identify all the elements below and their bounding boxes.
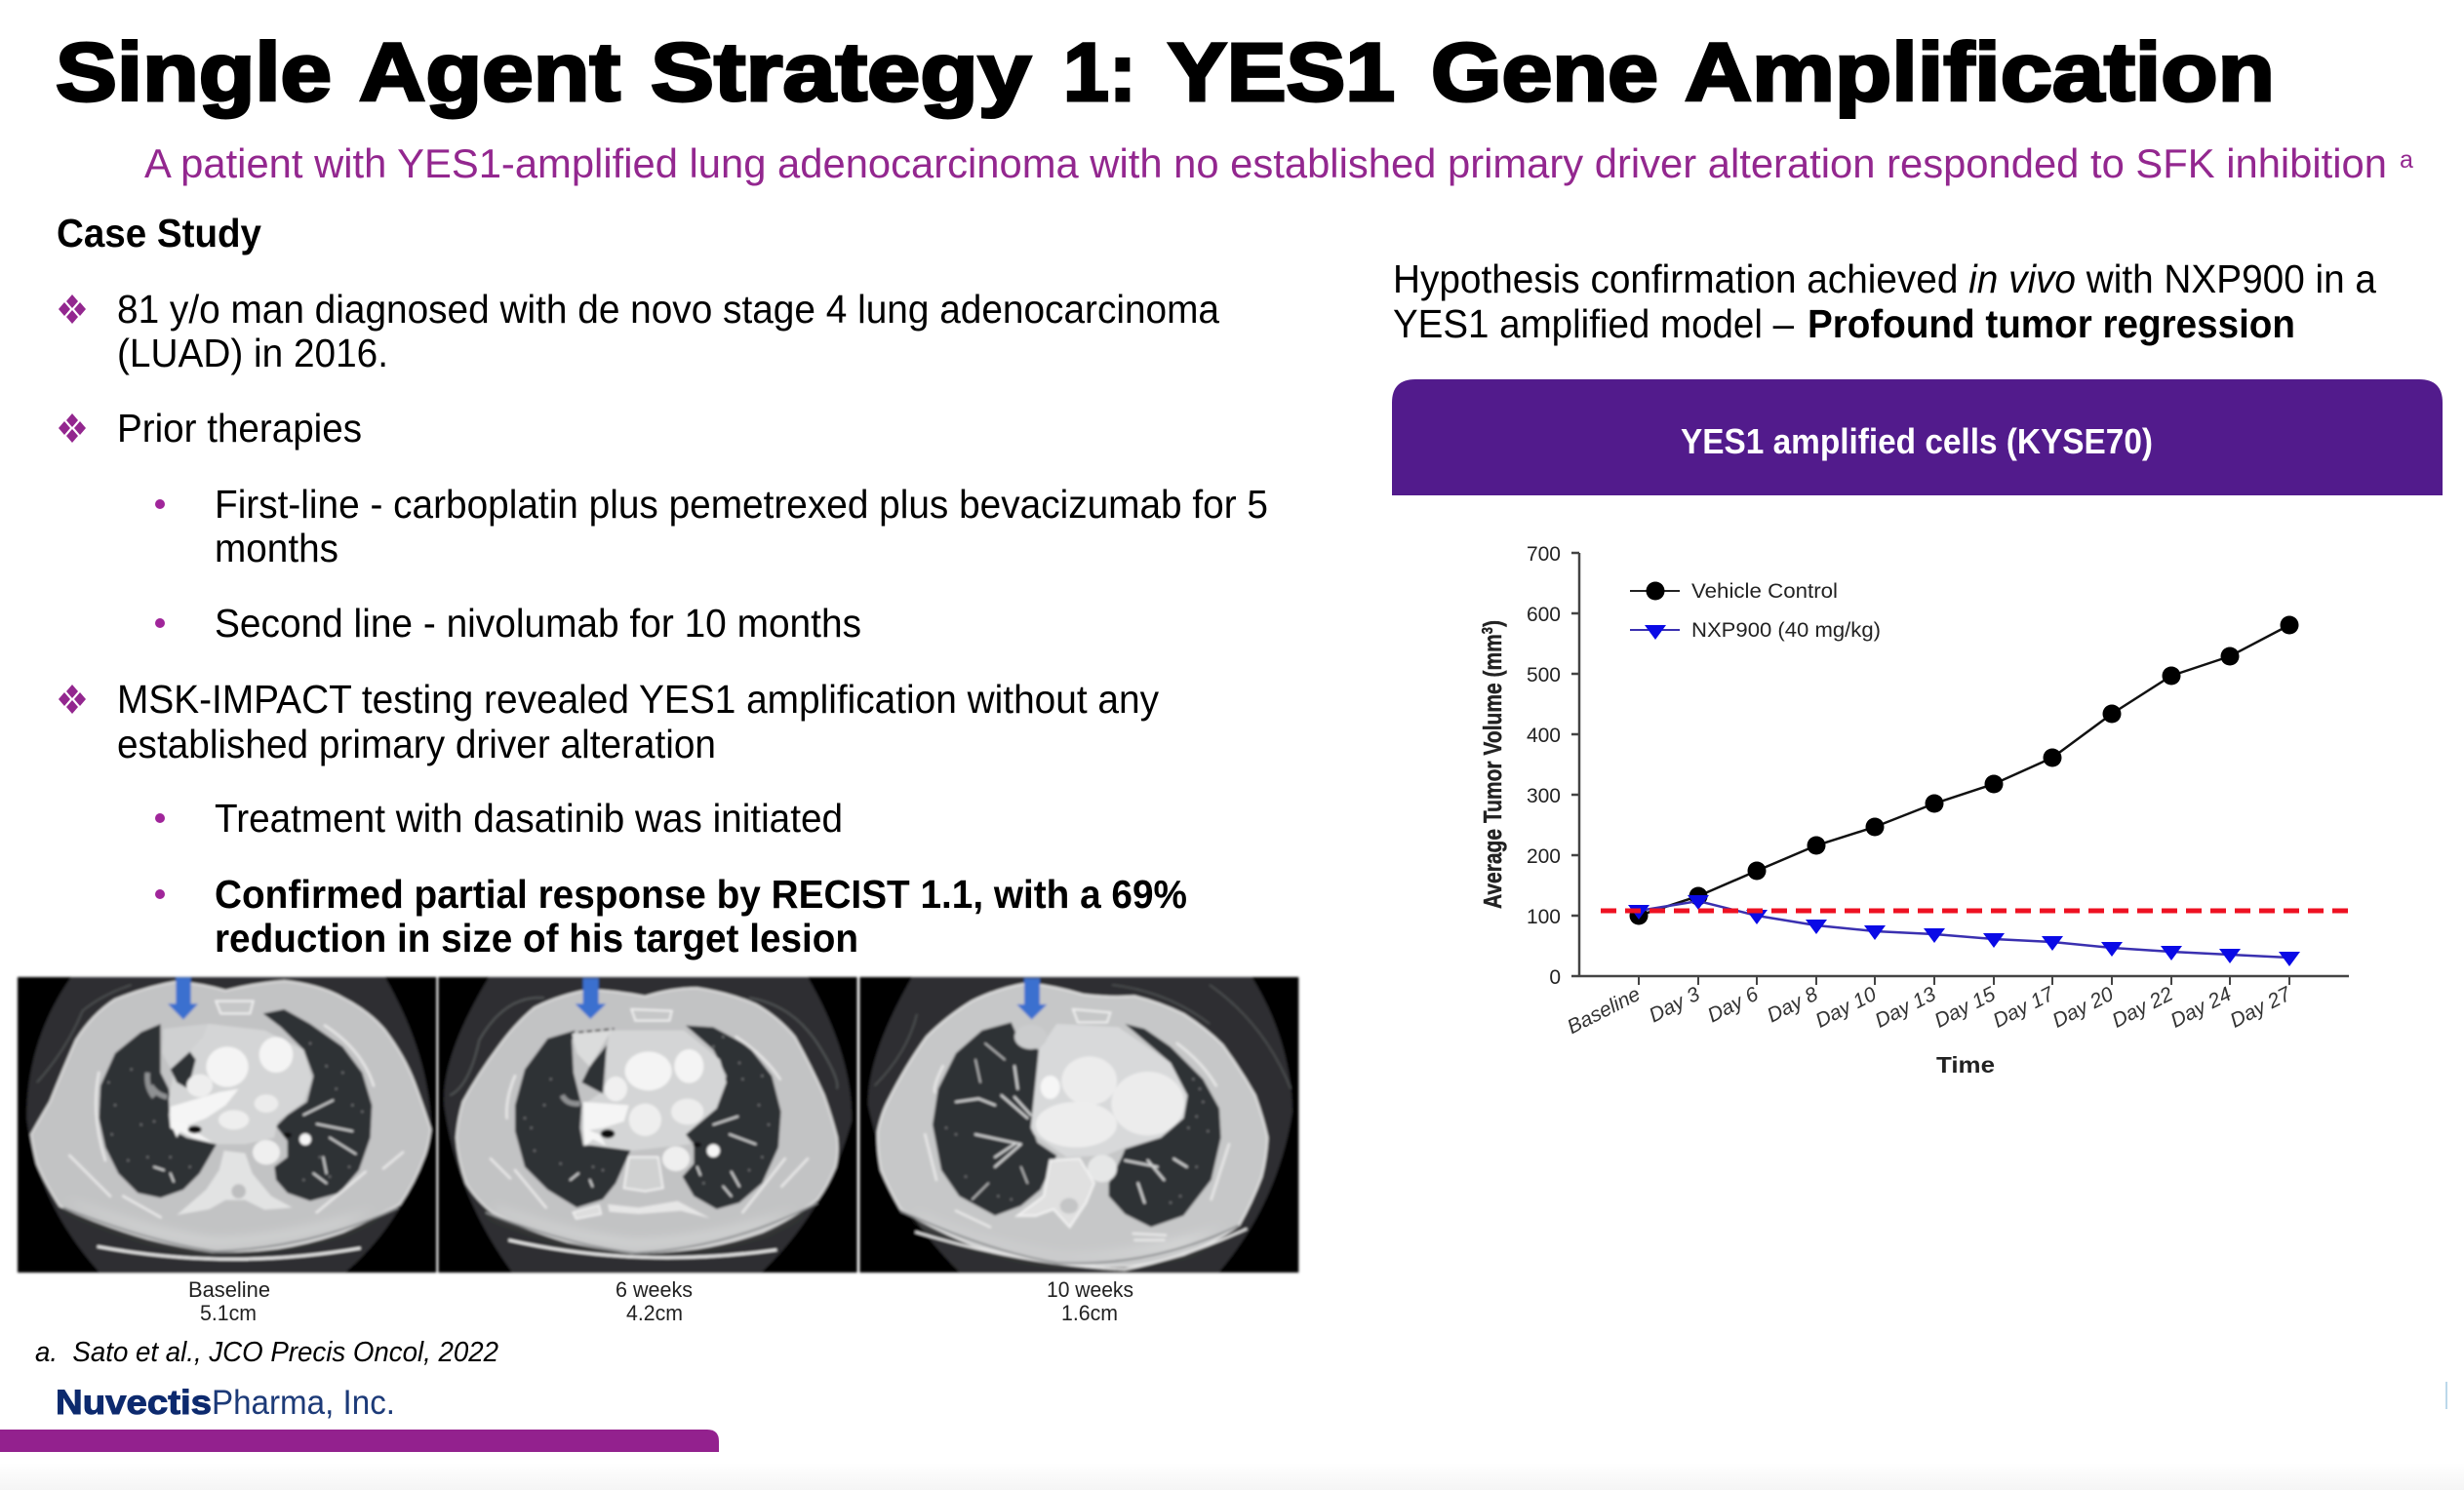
sub-bullet: confirmed response: reduction in size of his target lesion xyxy=(215,916,858,961)
y-axis tick labels: 200 xyxy=(1527,845,1561,868)
CT scan: 6 weeks xyxy=(438,977,857,1273)
x-axis labels: Day 27 xyxy=(2227,982,2295,1033)
series: NXP900 xyxy=(1628,895,2300,966)
CT scan captions: 5.1cm xyxy=(200,1301,257,1325)
y-axis title: Average Tumor Volume (mm xyxy=(1478,569,1507,909)
footer bar xyxy=(0,1430,719,1452)
CT scan captions xyxy=(188,1277,1133,1325)
bullet: patient xyxy=(59,287,1219,375)
sub-bullet: confirmed response xyxy=(155,872,1187,961)
x-axis title: Time xyxy=(1936,1052,1995,1078)
hypothesis text: Profound tumor regression xyxy=(1808,301,2295,346)
x-axis labels: Day 6 xyxy=(1704,983,1763,1027)
CT scan panels xyxy=(18,977,1298,1273)
y-axis tick labels: 0 xyxy=(1549,966,1561,989)
CT scan captions: 4.2cm xyxy=(626,1301,683,1325)
x-axis labels: Day 17 xyxy=(1990,982,2058,1033)
x-axis labels: Day 20 xyxy=(2049,983,2118,1033)
sub-bullet: second line: Second line - nivolumab for 10 months xyxy=(215,601,861,646)
x-axis labels: Day 22 xyxy=(2109,983,2177,1033)
logo: Nuvectis Pharma xyxy=(56,1384,395,1422)
arrow: 10 weeks lesion xyxy=(1016,978,1047,1020)
x-axis labels: Day 10 xyxy=(1812,983,1881,1033)
x-axis labels: Day 13 xyxy=(1872,983,1940,1033)
CT scan captions: 10 weeks xyxy=(1047,1277,1133,1302)
footnote: a. Sato et al., JCO Precis Oncol, 2022 xyxy=(35,1337,498,1368)
hypothesis text xyxy=(1393,256,2376,346)
CT scan: baseline xyxy=(18,977,436,1273)
chart header xyxy=(1392,379,2443,495)
heading: case study: Case Study xyxy=(57,211,261,255)
footer strip xyxy=(0,1463,2464,1490)
legend: Vehicle Control xyxy=(1691,580,1838,603)
reference line xyxy=(1601,909,2349,913)
y-axis tick labels: 700 xyxy=(1527,543,1561,566)
CT scan: 10 weeks xyxy=(859,977,1298,1273)
title: Agent xyxy=(359,26,620,118)
y-axis title: 3 xyxy=(1480,627,1496,634)
title: Single xyxy=(56,26,332,118)
bullet: MSK-IMPACT: established primary driver alteration xyxy=(117,722,716,766)
y-axis tick labels xyxy=(1527,543,1561,989)
x-axis labels: Day 15 xyxy=(1931,983,2000,1033)
legend: NXP900 (40 mg/kg) xyxy=(1691,619,1881,642)
bullet: prior therapies: Prior therapies xyxy=(117,406,362,451)
legend xyxy=(1630,580,1881,642)
CT scan captions: 1.6cm xyxy=(1061,1301,1118,1325)
x-axis labels: Day 24 xyxy=(2167,983,2235,1033)
title: 1: xyxy=(1063,26,1136,118)
sub-bullet: first line: First-line - carboplatin plus pemetrexed plus bevacizumab for 5 xyxy=(215,482,1268,527)
y-axis tick labels: 100 xyxy=(1527,906,1561,928)
CT scan captions: Baseline xyxy=(188,1277,270,1302)
y-axis tick labels: 400 xyxy=(1527,725,1561,747)
x-axis labels: Baseline xyxy=(1564,983,1644,1039)
hypothesis text: YES1 amplified model – xyxy=(1393,301,1794,346)
axes xyxy=(1571,553,2349,976)
subtitle: A patient with YES1-amplified lung adenocarcinoma with no established primary driver alteration responded to SFK inhibition xyxy=(144,140,2387,186)
sub-bullet: confirmed response: Confirmed partial response by RECIST 1.1, with a 69% xyxy=(215,872,1187,917)
CT scan captions: 6 weeks xyxy=(616,1277,693,1302)
subtitle: a xyxy=(2400,146,2413,174)
hypothesis text: Hypothesis confirmation achieved in vivo with NXP900 in a xyxy=(1393,256,2376,301)
title: YES1 xyxy=(1168,26,1395,118)
y-axis tick labels: 600 xyxy=(1527,604,1561,626)
bullet: MSK-IMPACT xyxy=(59,677,1160,766)
chart header: YES1 amplified cells (KYSE70) xyxy=(1681,421,2153,461)
x-axis labels: Day 8 xyxy=(1764,983,1822,1027)
sub-bullet: treatment: Treatment with dasatinib was initiated xyxy=(215,796,843,841)
y-axis tick labels: 300 xyxy=(1527,785,1561,807)
bullet: patient: 81 y/o man diagnosed with de novo stage 4 lung adenocarcinoma xyxy=(117,287,1219,332)
series: vehicle control xyxy=(1629,616,2298,924)
sub-bullet: first line: months xyxy=(215,526,338,570)
title xyxy=(56,26,2275,118)
logo: Nuvectis Pharma: Pharma, Inc. xyxy=(212,1384,395,1422)
title: Gene xyxy=(1431,26,1658,118)
edge mark xyxy=(2445,1382,2447,1409)
arrow: baseline lesion xyxy=(168,978,198,1020)
sub-bullet: first line xyxy=(155,482,1268,570)
bullet: MSK-IMPACT: MSK-IMPACT testing revealed YES1 amplification without any xyxy=(117,677,1160,722)
x-axis labels xyxy=(1564,982,2295,1039)
y-axis tick labels: 500 xyxy=(1527,664,1561,686)
arrow: 6 weeks lesion xyxy=(576,978,606,1019)
line chart: tumor volume xyxy=(1478,543,2349,1078)
panel: case study text xyxy=(57,211,1268,961)
title: Amplification xyxy=(1685,26,2275,118)
title: Strategy xyxy=(651,26,1031,118)
y-axis title: ) xyxy=(1478,620,1507,627)
logo: Nuvectis Pharma: Nuvectis xyxy=(56,1384,212,1422)
x-axis labels: Day 3 xyxy=(1646,983,1704,1027)
bullet: patient: (LUAD) in 2016. xyxy=(117,331,388,375)
